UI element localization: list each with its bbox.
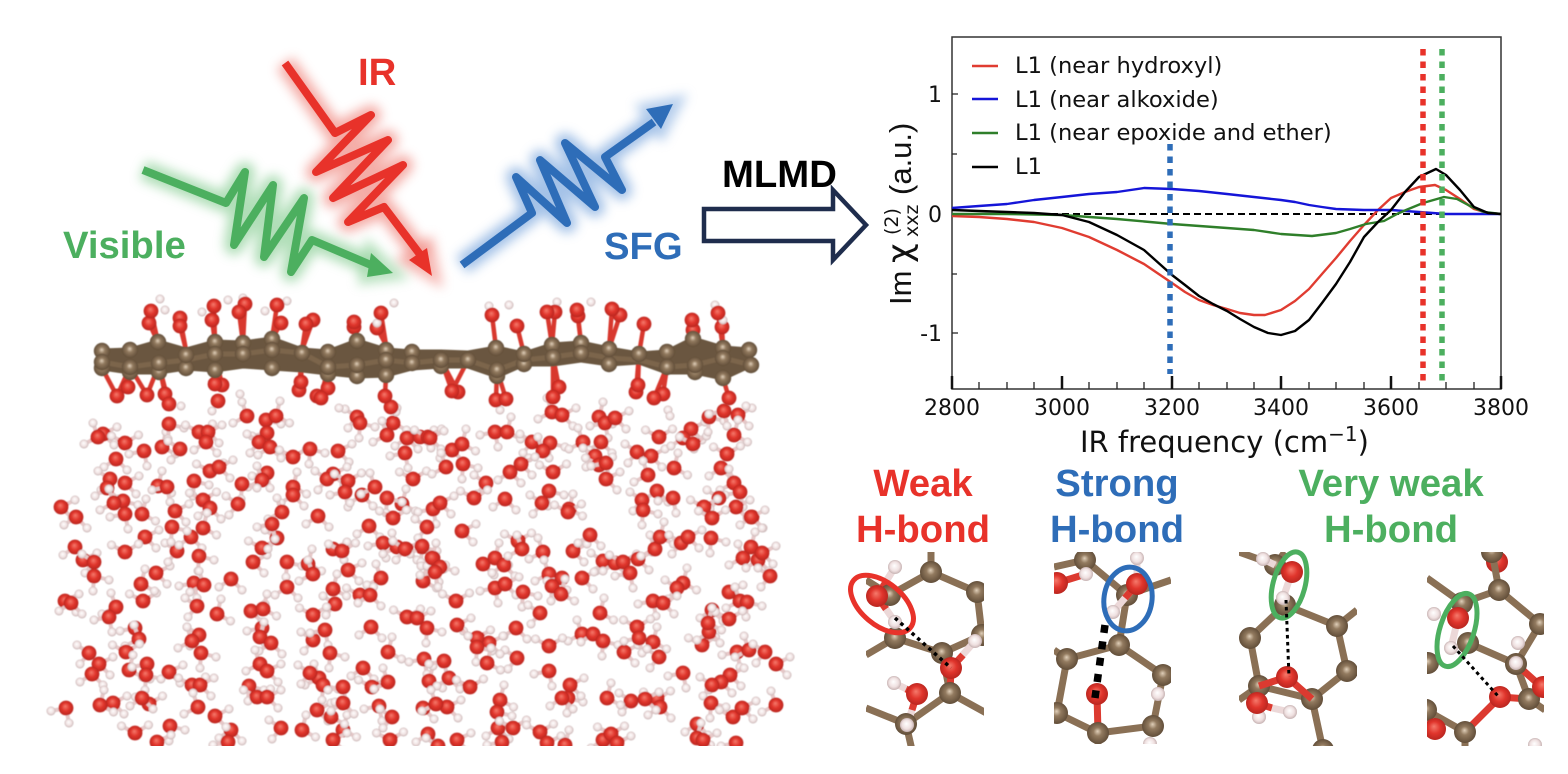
arrow: SFG beam	[462, 104, 673, 265]
panel: very weak H-bond structure 2	[1427, 552, 1544, 746]
curve: near hydroxyl	[952, 185, 1501, 315]
y axis title	[880, 123, 923, 305]
y tick labels: -1	[920, 322, 942, 347]
label: IR: IR	[358, 51, 396, 94]
marker: dotted hydrogen bond	[1453, 646, 1498, 696]
x axis title: −1	[1328, 422, 1358, 446]
heading: strong H-bond: Strong	[1055, 462, 1179, 505]
heading: weak H-bond: H-bond	[856, 508, 990, 551]
x tick labels: 2800	[924, 396, 980, 421]
arrow: IR beam	[285, 63, 432, 276]
panel: strong H-bond structure	[1054, 552, 1171, 744]
y tick labels: 1	[928, 83, 942, 108]
y axis title: χ	[880, 243, 920, 263]
panel: graphene oxide sheet	[94, 294, 759, 420]
carbon atoms	[94, 331, 759, 386]
marker: green dotted line	[1439, 49, 1445, 381]
marker: red oval on O-H	[840, 564, 924, 644]
y tick labels	[920, 83, 942, 347]
heading: weak H-bond: Weak	[873, 462, 973, 505]
zero line	[952, 213, 1501, 215]
marker: green oval on O-H	[1265, 548, 1313, 622]
curve: near alkoxide	[952, 188, 1501, 214]
panel: very weak H-bond structure 1	[1239, 548, 1358, 761]
x tick labels	[924, 396, 1529, 421]
x tick labels: 3000	[1034, 396, 1090, 421]
carbon framework bonds	[102, 339, 751, 378]
marker: thick dotted hydrogen bond	[1095, 625, 1105, 698]
curve: L1 total	[952, 169, 1501, 335]
y axis title: Im	[883, 271, 918, 305]
axis ticks	[952, 376, 1501, 389]
y axis title: xxz	[901, 205, 923, 237]
curve: near epoxide and ether	[952, 197, 1501, 236]
legend: L1	[1015, 154, 1042, 180]
heading: very weak H-bond: Very weak	[1298, 462, 1484, 505]
heading: very weak H-bond: H-bond	[1324, 508, 1458, 551]
y axis title: (2)	[881, 208, 903, 235]
legend: L1 (near epoxide and ether)	[1015, 120, 1332, 146]
x tick labels: 3600	[1363, 396, 1419, 421]
label: SFG: SFG	[604, 225, 683, 268]
plot frame	[952, 37, 1501, 389]
panel: water layer below graphene oxide	[46, 394, 794, 762]
panel: weak H-bond structure	[848, 552, 984, 746]
x tick labels: 3800	[1473, 396, 1529, 421]
marker: green oval on O-H	[1429, 589, 1485, 671]
chart: Im chi(2) spectrum	[880, 37, 1529, 459]
label: Visible: Visible	[63, 224, 186, 267]
x axis title: IR frequency (cm	[1080, 425, 1328, 459]
legend	[972, 53, 1332, 180]
x axis title: )	[1358, 425, 1369, 459]
marker: red dotted line	[1420, 49, 1426, 381]
heading: strong H-bond: H-bond	[1050, 508, 1184, 551]
marker: blue oval on O-H	[1100, 564, 1156, 634]
marker: dotted hydrogen bond	[895, 618, 951, 668]
oxygen groups bonded to sheet	[102, 294, 750, 420]
y axis title: (a.u.)	[883, 123, 918, 195]
x tick labels: 3200	[1144, 396, 1200, 421]
legend: L1 (near alkoxide)	[1015, 87, 1219, 113]
marker: dotted hydrogen bond	[1286, 600, 1289, 677]
arrow: visible beam	[143, 170, 393, 277]
marker: blue dotted line at 3200	[1167, 144, 1173, 374]
legend: L1 (near hydroxyl)	[1015, 53, 1222, 79]
label: MLMD: MLMD	[722, 153, 837, 196]
y tick labels: 0	[928, 203, 942, 228]
x tick labels: 3400	[1253, 396, 1309, 421]
arrow: MLMD	[704, 190, 866, 260]
